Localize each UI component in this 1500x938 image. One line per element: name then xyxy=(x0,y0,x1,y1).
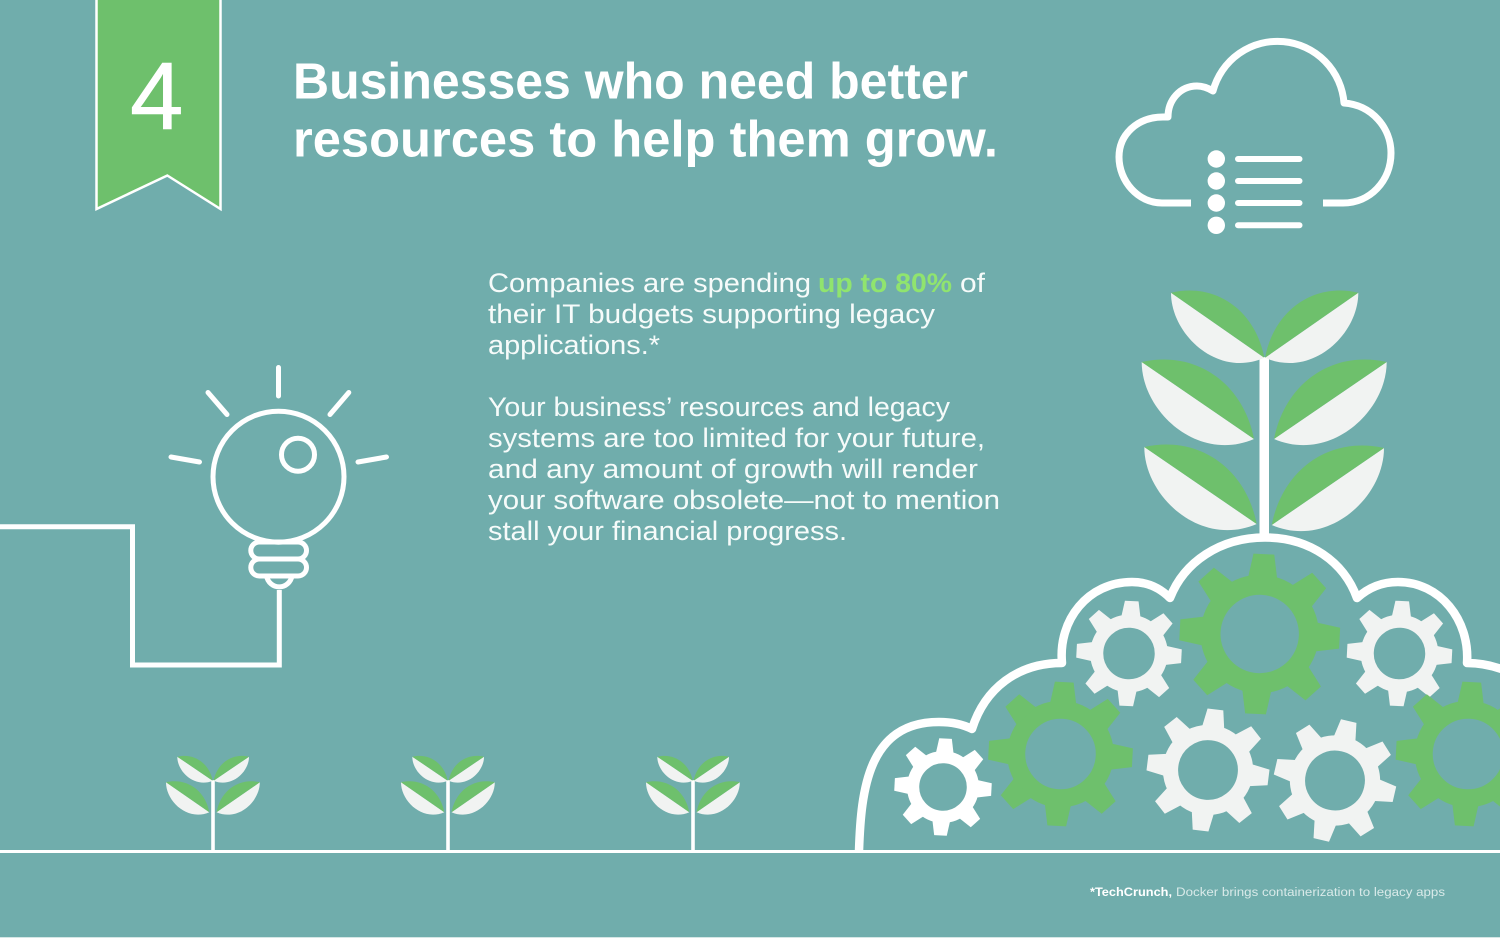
ground line xyxy=(0,850,1500,853)
paragraph: legacy systems xyxy=(488,392,1000,546)
gear: white upper right xyxy=(1344,598,1455,709)
icon: cloud with list xyxy=(1119,41,1391,234)
cloud outline over gears xyxy=(859,538,1500,851)
title: resources to help them grow. xyxy=(293,110,998,168)
sprout 1 xyxy=(166,756,260,851)
body text xyxy=(488,268,1000,546)
gear: white upper left xyxy=(1074,598,1184,709)
paragraph: legacy systems: stall your financial progress. xyxy=(488,516,847,546)
sprout 3 xyxy=(646,756,740,851)
icon: light bulb with wire xyxy=(0,368,386,665)
gear: white middle xyxy=(1140,702,1276,838)
paragraph: IT budgets: their IT budgets supporting legacy xyxy=(488,299,936,329)
paragraph: legacy systems: Your business’ resources and legacy xyxy=(488,392,951,422)
paragraph: IT budgets xyxy=(488,268,986,360)
paragraph: legacy systems: your software obsolete—not to mention xyxy=(488,485,1000,515)
paragraph: IT budgets: of xyxy=(960,268,986,298)
large plant xyxy=(1142,291,1387,537)
gear: white right xyxy=(1262,707,1408,854)
footnote: *TechCrunch, xyxy=(1090,885,1172,899)
gear: white lower left xyxy=(892,736,994,838)
gear: large green center xyxy=(1176,550,1344,718)
footnote xyxy=(1090,885,1445,899)
paragraph: IT budgets: applications.* xyxy=(488,330,660,360)
gear: green left xyxy=(985,678,1136,830)
ribbon badge with number 4: 4 xyxy=(130,43,183,150)
paragraph: legacy systems: and any amount of growth will render xyxy=(488,454,978,484)
paragraph: IT budgets: up to 80% xyxy=(818,268,952,298)
title xyxy=(293,53,998,168)
paragraph: legacy systems: systems are too limited for your future, xyxy=(488,423,985,453)
title: Businesses who need better xyxy=(293,53,968,110)
ribbon badge with number 4 xyxy=(96,0,220,209)
gear: green right xyxy=(1392,678,1500,830)
sprout 2 xyxy=(401,756,495,851)
paragraph: IT budgets: Companies are spending xyxy=(488,268,811,298)
footnote: Docker brings containerization to legacy apps xyxy=(1176,885,1445,899)
